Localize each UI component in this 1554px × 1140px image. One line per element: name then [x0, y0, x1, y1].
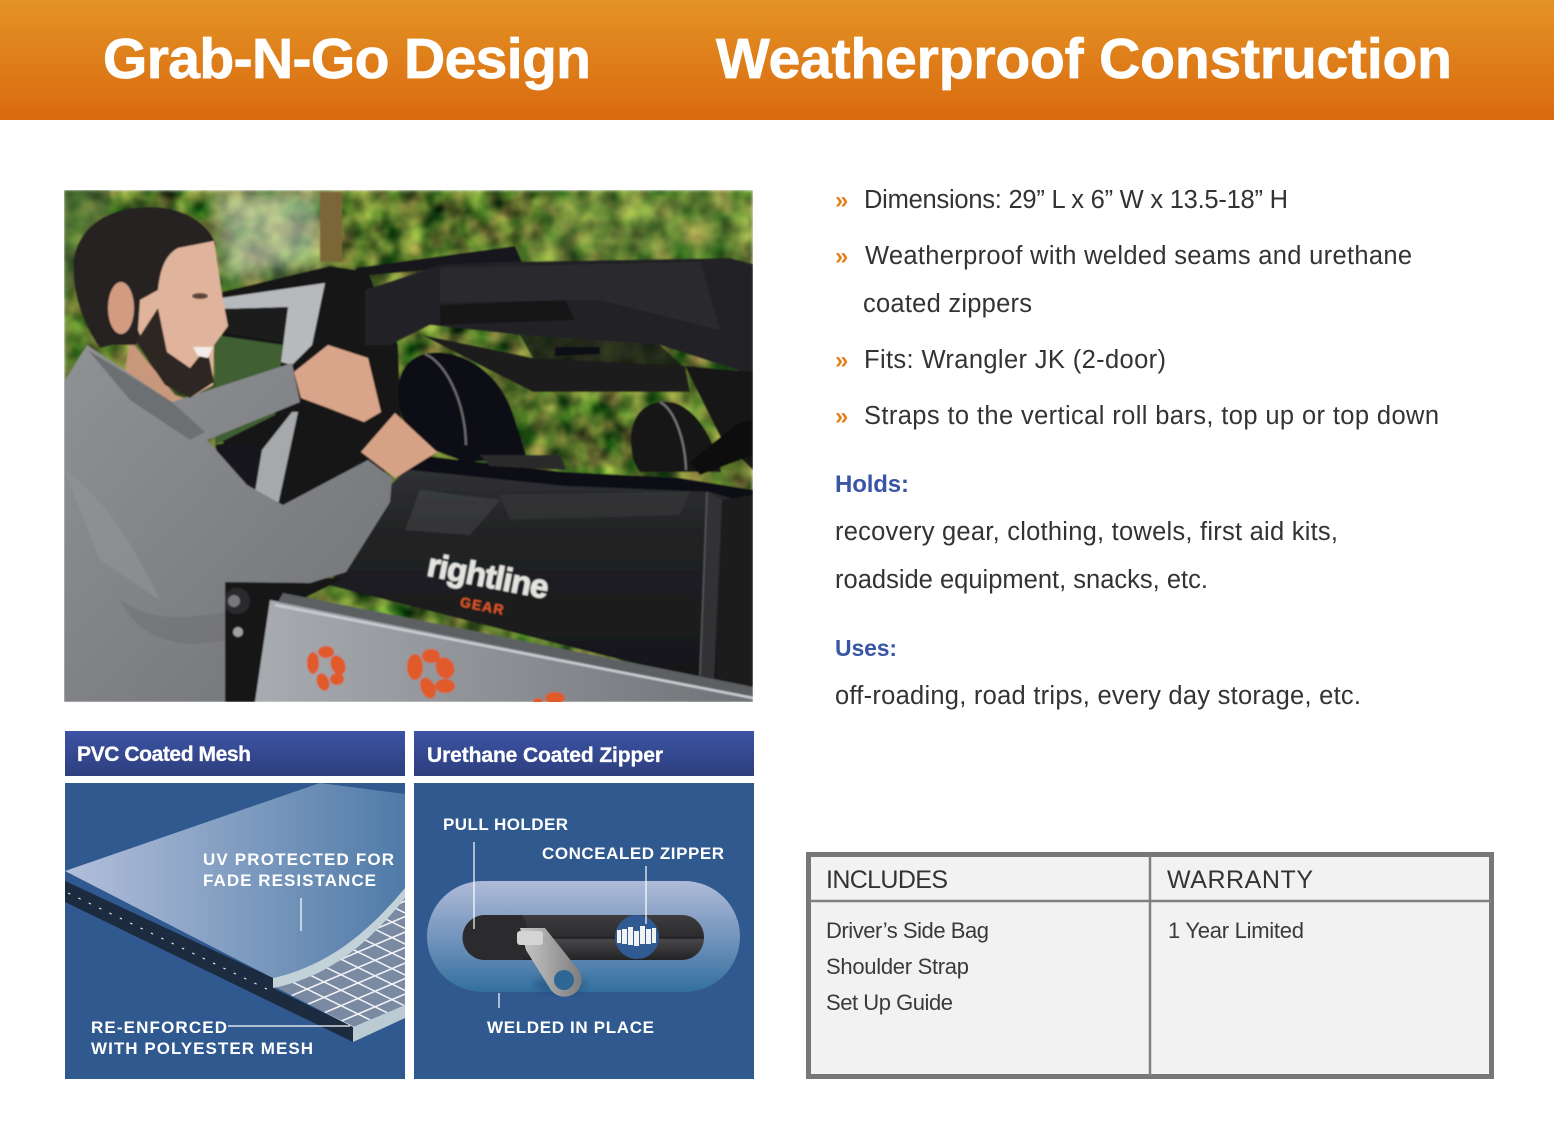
top rail — [355, 246, 522, 276]
column: includes: INCLUDES — [826, 866, 948, 894]
pull holder — [462, 915, 528, 960]
photo: man strapping bag to Jeep roll bar — [64, 190, 753, 706]
text block: holds — [835, 471, 1338, 594]
man: ear — [108, 282, 134, 334]
callout: pull holder — [443, 815, 568, 929]
bullet: fits: Fits: Wrangler JK (2-door) — [864, 346, 1166, 374]
bullet: straps: Straps to the vertical roll bars, top up or top down — [864, 402, 1439, 430]
panel title: PVC Coated Mesh — [65, 731, 405, 776]
panel: urethane coated zipper diagram — [414, 783, 754, 1079]
heading: Weatherproof Construction: Weatherproof Construction — [716, 27, 1452, 91]
top PVC surface — [65, 783, 405, 978]
zipper pull — [517, 928, 586, 997]
man: hair — [73, 207, 216, 348]
door — [222, 578, 345, 702]
callout: pull holder: PULL HOLDER — [443, 815, 568, 834]
callout: re-enforced mesh: RE-ENFORCED — [91, 1018, 227, 1037]
storage bag — [328, 455, 753, 692]
table: includes and warranty — [808, 854, 1492, 1076]
text block: holds: Holds: — [835, 471, 909, 498]
callout: UV protected: UV PROTECTED FOR — [203, 850, 394, 869]
column: warranty: WARRANTY — [1167, 866, 1313, 894]
callout: UV protected — [203, 850, 394, 931]
Jeep frame and window — [222, 266, 402, 512]
headrests — [398, 352, 527, 462]
panel: PVC coated mesh diagram — [65, 783, 405, 1079]
man: beard — [136, 308, 214, 398]
callout: welded in place: WELDED IN PLACE — [487, 1018, 654, 1037]
column: warranty — [1167, 866, 1313, 943]
text block: holds: roadside equipment, snacks, etc. — [835, 566, 1208, 594]
man: face — [138, 241, 228, 398]
callout: re-enforced mesh: WITH POLYESTER MESH — [91, 1039, 313, 1058]
column: includes: Shoulder Strap — [826, 954, 969, 979]
column: includes: Driver’s Side Bag — [826, 918, 989, 943]
paw prints — [307, 646, 565, 706]
callout: UV protected: FADE RESISTANCE — [203, 871, 376, 890]
man: hands — [294, 345, 381, 422]
man: neck — [124, 344, 184, 403]
text block: uses: Uses: — [835, 635, 897, 661]
header banner — [0, 0, 1554, 120]
bag logo: rightline — [424, 546, 552, 606]
zipper slot — [463, 915, 704, 960]
text block: uses — [835, 635, 1361, 710]
feature bullet list — [835, 186, 1439, 430]
zipper body — [427, 881, 740, 992]
column: includes: Set Up Guide — [826, 990, 953, 1015]
bullet: weatherproof: coated zippers — [863, 290, 1032, 318]
panel title: Urethane Coated Zipper — [414, 731, 754, 776]
column: includes — [826, 866, 989, 1015]
mesh sheet side edge — [65, 881, 353, 1042]
man: shirt — [64, 345, 392, 702]
text block: uses: off-roading, road trips, every day storage, etc. — [835, 682, 1361, 710]
heading: Grab-N-Go Design: Grab-N-Go Design — [103, 27, 591, 91]
bullet: dimensions: » — [835, 187, 848, 214]
bullet: dimensions: Dimensions: 29” L x 6” W x 13.5-18” H — [864, 186, 1288, 214]
bag logo: GEAR — [459, 594, 505, 618]
foliage background — [64, 190, 753, 702]
panel title: PVC Coated Mesh: PVC Coated Mesh — [77, 743, 251, 766]
bullet: weatherproof — [835, 242, 1412, 318]
panel title: Urethane Coated Zipper: Urethane Coated Zipper — [427, 744, 663, 767]
bullet: weatherproof: Weatherproof with welded seams and urethane — [865, 242, 1412, 270]
concealed zipper teeth — [615, 915, 659, 959]
column: warranty: 1 Year Limited — [1168, 918, 1304, 943]
bullet: straps: » — [835, 403, 848, 430]
callout: concealed zipper: CONCEALED ZIPPER — [542, 844, 724, 863]
soft top roll bar — [365, 258, 753, 375]
text block: holds: recovery gear, clothing, towels, first aid kits, — [835, 518, 1338, 546]
bullet: weatherproof: » — [835, 243, 848, 270]
bullet: fits: » — [835, 347, 848, 374]
callout: re-enforced mesh — [91, 1018, 350, 1058]
exposed polyester mesh — [273, 897, 405, 1027]
